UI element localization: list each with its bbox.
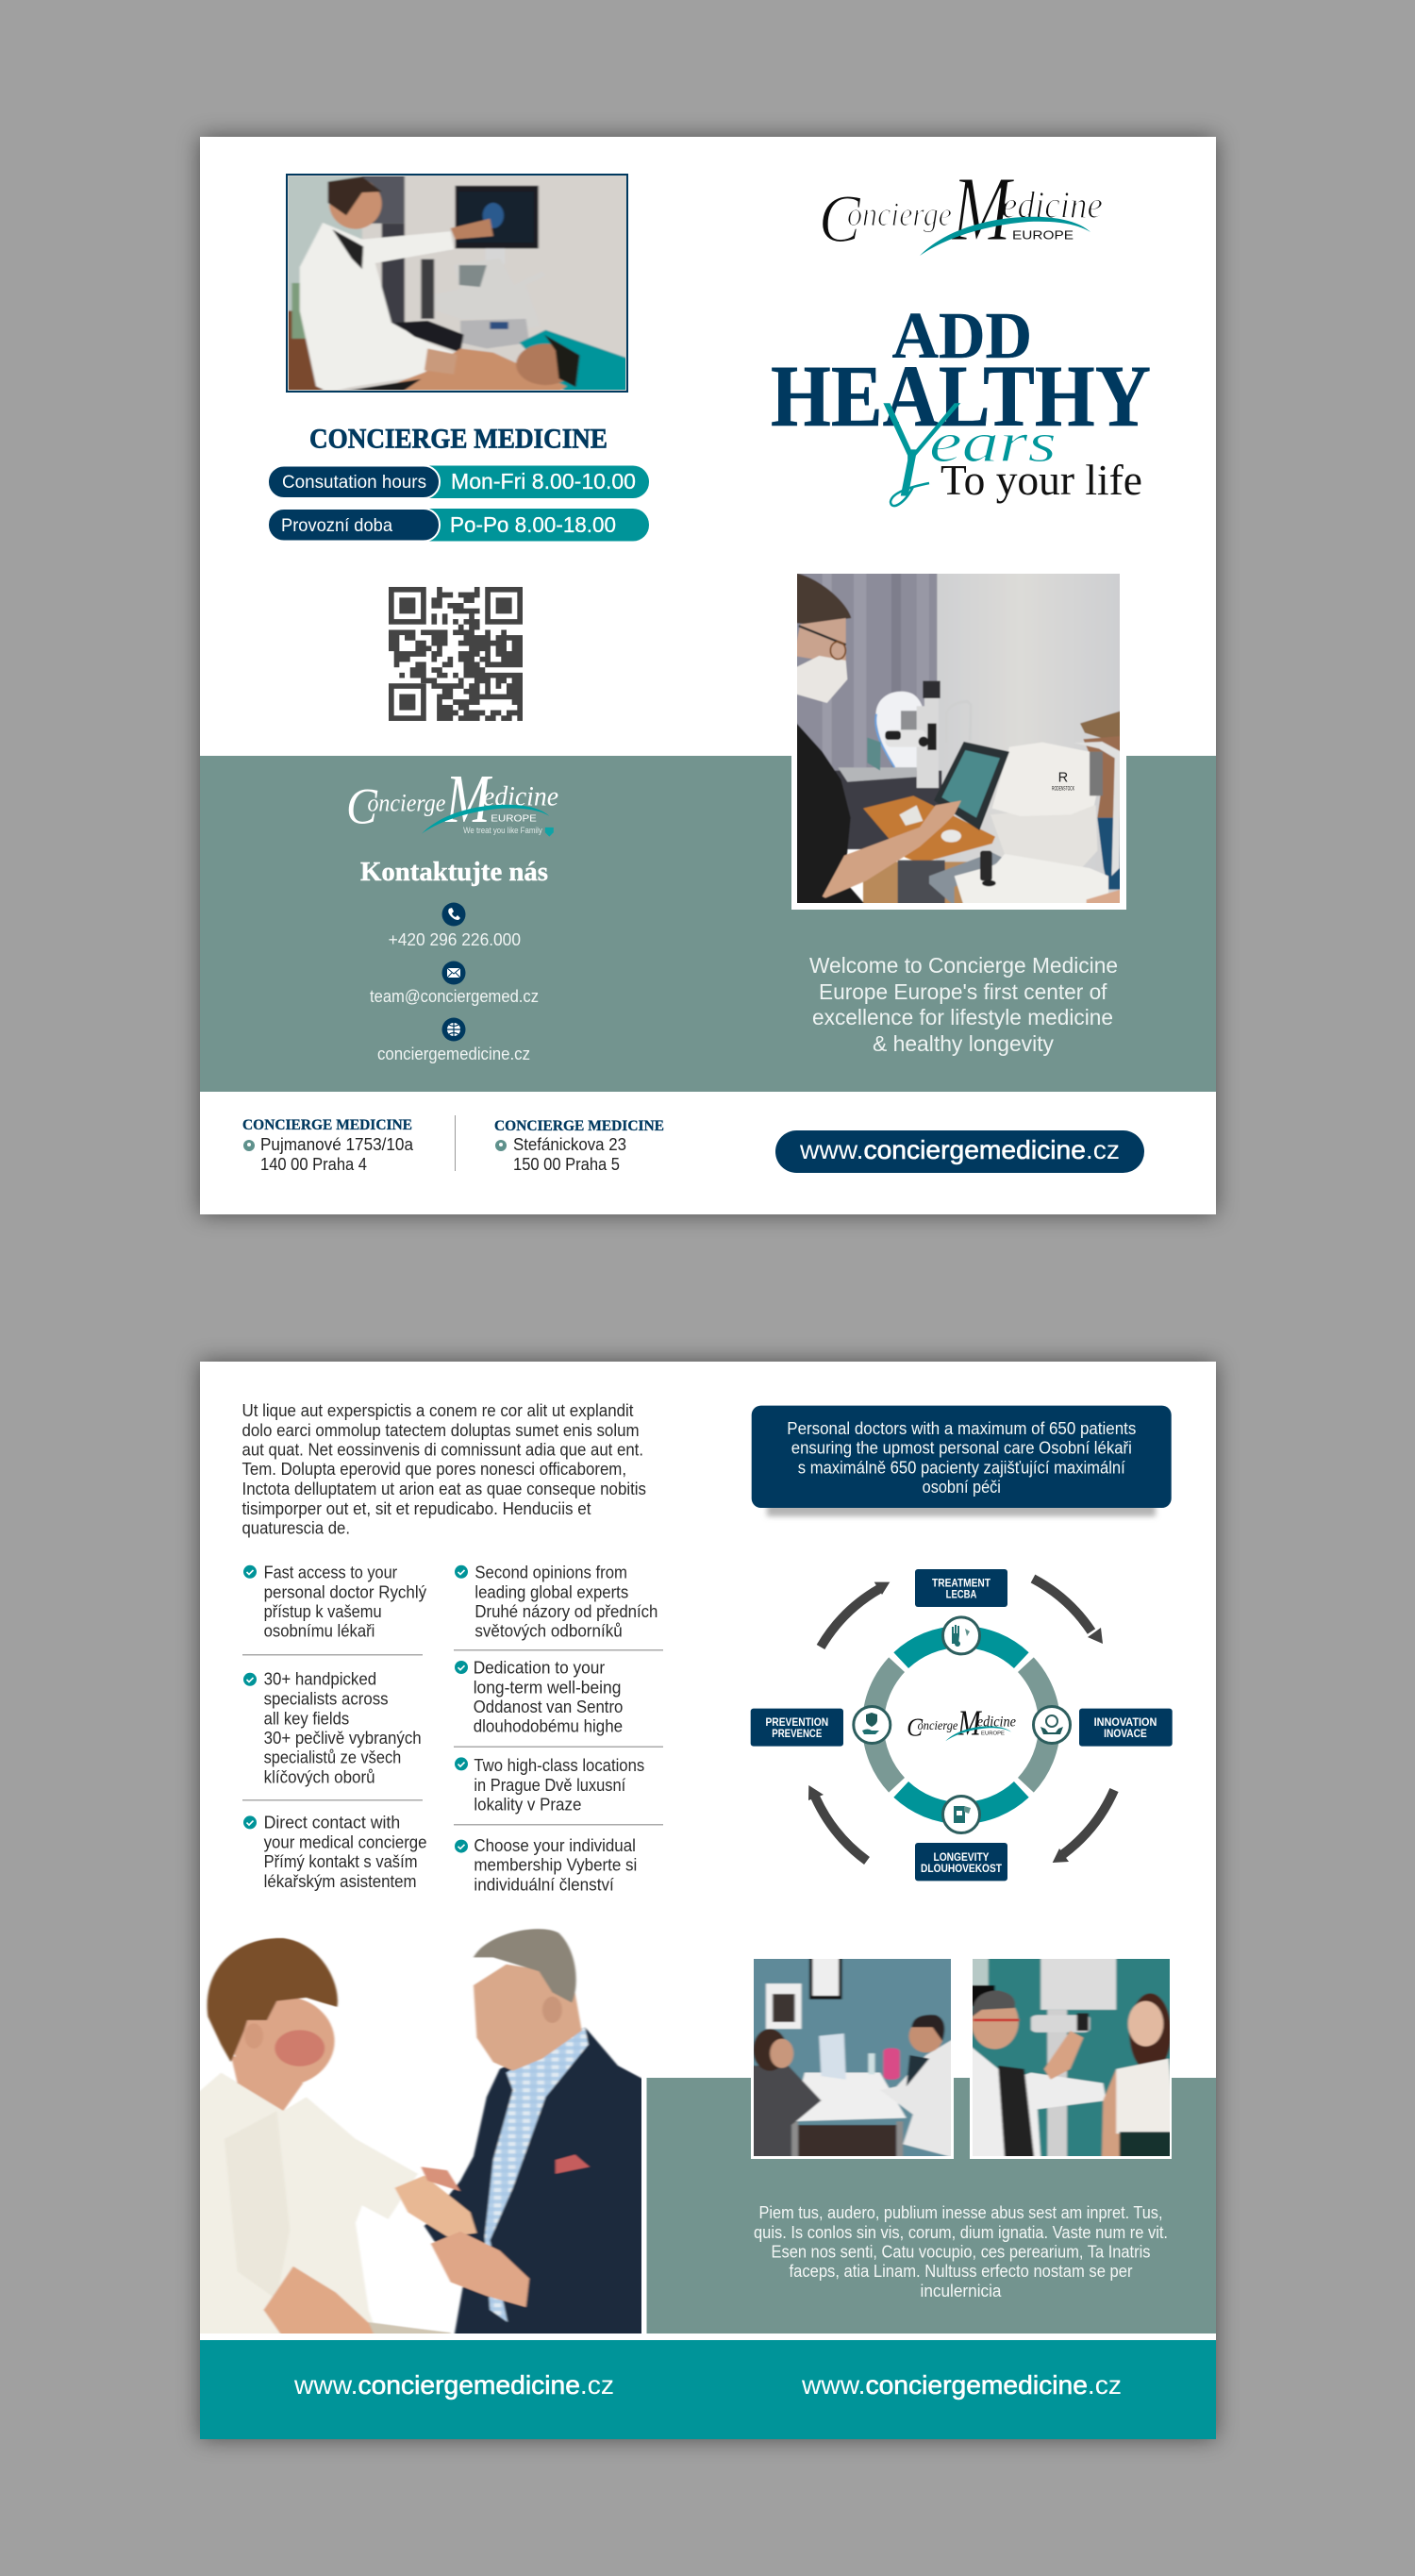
title: Add Healthy Years to your life: ADD (892, 300, 1032, 373)
icon: prevention (854, 1706, 891, 1744)
logo: white logo on contact band: We treat you like Family (463, 826, 542, 835)
address: Pujmanové: Pujmanové 1753/10a (260, 1135, 414, 1154)
list item: fast access (243, 1564, 426, 1641)
heading: Concierge Medicine: CONCIERGE MEDICINE (309, 423, 608, 455)
hours row: consultation hours: Mon-Fri 8.00-10.00 (451, 469, 636, 493)
callout: personal doctors: s maximálně 650 pacienty zajišťující maximální (798, 1459, 1125, 1478)
logo: Concierge Medicine Europe: oncierge (847, 195, 952, 233)
text: welcome message: Welcome to Concierge Medicine (809, 953, 1118, 978)
list item: second opinions (455, 1564, 658, 1641)
list item: membership: Choose your individual (474, 1836, 636, 1855)
list item: handpicked specialists (243, 1670, 422, 1786)
hours row: consultation hours (268, 466, 649, 498)
title: Add Healthy Years to your life: To your life (941, 456, 1142, 504)
title: Add Healthy Years to your life: HEALTHY (771, 348, 1151, 445)
text: welcome message (809, 953, 1118, 1056)
list item: fast access: osobnímu lékaři (264, 1622, 375, 1641)
icon: innovation (1034, 1706, 1070, 1744)
logo: Concierge Medicine Europe: M (950, 159, 1015, 260)
text: intro paragraph: Inctota delluptatem ut arion eat as quae conseque nobitis (241, 1480, 646, 1498)
list item: direct contact: Přímý kontakt s vaším (264, 1852, 417, 1871)
text: intro paragraph (241, 1401, 646, 1538)
text: teal band paragraph (754, 2203, 1168, 2300)
text: intro paragraph: aut quat. Net eossinvenis di comnissunt adia que aut ent. (241, 1440, 643, 1459)
text: teal band paragraph: Esen nos senti, Catu vocupio, ces perearium, Ta Inatris (772, 2243, 1151, 2262)
list item: fast access: personal doctor Rychlý (264, 1582, 426, 1601)
text: welcome message: excellence for lifestyle medicine (812, 1005, 1113, 1029)
list item: dedication: Oddanost van Sentro (474, 1698, 623, 1716)
address: Stefánickova: CONCIERGE MEDICINE (494, 1118, 664, 1134)
list item: membership: membership Vyberte si (474, 1856, 637, 1875)
list item: dedication: Dedication to your (474, 1659, 605, 1678)
photo: eye examination device (791, 573, 1126, 910)
logo: Concierge Medicine Europe: C (819, 181, 861, 257)
label: innovation: INNOVATION (1094, 1715, 1157, 1729)
list item: two locations: lokality v Praze (474, 1796, 581, 1815)
photo: doctor consultation at desk (749, 1956, 956, 2160)
list item: second opinions: leading global experts (474, 1582, 628, 1601)
label: prevention (751, 1709, 843, 1747)
text: intro paragraph: Tem. Dolupta eperovid que pores nonesci officaborem, (241, 1460, 626, 1479)
photo: eye examination device: R (1058, 770, 1068, 785)
contact: website (377, 1017, 530, 1063)
list item: handpicked specialists: specialists across (264, 1690, 389, 1709)
text: teal band paragraph: Piem tus, audero, publium inesse abus sest am inpret. Tus, (758, 2203, 1162, 2222)
label: longevity (915, 1843, 1007, 1881)
arrow: prevention to treatment (821, 1582, 890, 1648)
logo: Concierge Medicine Europe: edicine (1002, 183, 1103, 226)
list item: two locations (455, 1756, 644, 1815)
text: intro paragraph: tisimporper out et, sit et repudicabo. Henduciis et (241, 1499, 591, 1518)
panel: teal text band (647, 2078, 1216, 2333)
contact: phone: +420 296 226.000 (389, 930, 521, 949)
label: treatment: LECBA (946, 1587, 977, 1600)
list item: handpicked specialists: all key fields (264, 1709, 349, 1728)
label: innovation: INOVACE (1104, 1727, 1147, 1740)
text: welcome message: Europe Europe's first center of (819, 979, 1107, 1004)
address: Stefánickova: Stefánickova 23 (513, 1135, 626, 1154)
list item: handpicked specialists: klíčových oborů (264, 1767, 375, 1786)
address: Pujmanové: 140 00 Praha 4 (260, 1155, 367, 1174)
list item: direct contact: Direct contact with (264, 1814, 400, 1832)
hours row: provozní doba: Po-Po 8.00-18.00 (450, 512, 616, 537)
QR code (389, 590, 523, 718)
logo: centre of ring: edicine (977, 1715, 1016, 1731)
logo: centre of ring: EUROPE (981, 1731, 1006, 1737)
list item: handpicked specialists: 30+ handpicked (264, 1670, 376, 1689)
list item: dedication (455, 1659, 623, 1736)
panel: inner page of brochure (195, 1362, 1216, 2439)
label: treatment (915, 1569, 1007, 1607)
panel: teal contact band (200, 756, 1216, 1092)
list item: second opinions: Druhé názory od předních (474, 1602, 658, 1621)
logo: centre of ring: C (907, 1712, 923, 1741)
list item: direct contact: lékařským asistentem (264, 1872, 417, 1891)
arrow: longevity to prevention (808, 1785, 867, 1861)
logo: white logo on contact band (346, 761, 558, 837)
logo: Concierge Medicine Europe (819, 159, 1103, 260)
list item: handpicked specialists: specialistů ze všech (264, 1748, 401, 1767)
list item: two locations: Two high-class locations (474, 1756, 644, 1775)
logo: white logo on contact band: edicine (483, 780, 558, 811)
ring: four segments (873, 1636, 1050, 1814)
list item: second opinions: světových odborníků (474, 1622, 623, 1641)
footer band with websites (200, 2340, 1216, 2439)
callout: personal doctors: Personal doctors with a maximum of 650 patients (787, 1419, 1136, 1438)
list item: second opinions: Second opinions from (474, 1564, 627, 1582)
photo: eye examination with patient (969, 1957, 1175, 2160)
contact: email (370, 961, 539, 1006)
text: welcome message: & healthy longevity (873, 1031, 1054, 1056)
text: intro paragraph: quaturescia de. (241, 1519, 350, 1538)
list item: direct contact: your medical concierge (264, 1833, 426, 1852)
list item: direct contact (243, 1814, 426, 1891)
logo: Concierge Medicine Europe: EUROPE (1012, 228, 1074, 243)
title: Add Healthy Years to your life (771, 300, 1151, 528)
callout: personal doctors: osobní péči (923, 1478, 1001, 1497)
logo: white logo on contact band: M (445, 761, 493, 837)
photo: consultant with young patient (195, 1929, 644, 2338)
hours row: provozní doba: Provozní doba (281, 516, 392, 536)
label: longevity: LONGEVITY (934, 1850, 989, 1864)
address: Pujmanové: CONCIERGE MEDICINE (242, 1117, 412, 1133)
logo: centre of ring: oncierge (918, 1718, 957, 1732)
logo: centre of ring: M (957, 1704, 983, 1744)
list item: handpicked specialists: 30+ pečlivě vybraných (264, 1729, 422, 1748)
label: treatment: TREATMENT (932, 1576, 991, 1589)
list item: dedication: dlouhodobému highe (474, 1717, 623, 1736)
text: intro paragraph: dolo earci ommolup tatectem doluptas sumet enis solum (241, 1421, 640, 1440)
text: teal band paragraph: faceps, atia Linam. Nultuss erfecto nostam se per (789, 2262, 1132, 2281)
list item: membership: individuální členství (474, 1875, 614, 1894)
website button: www.conciergemedicine.cz (799, 1135, 1120, 1164)
logo: white logo on contact band: oncierge (367, 789, 445, 817)
heading: contact us: Kontaktujte nás (360, 857, 548, 887)
address: Stefánickova (494, 1118, 664, 1174)
label: prevention: PREVENTION (765, 1715, 828, 1729)
logo: white logo on contact band: EUROPE (491, 814, 537, 825)
title: Add Healthy Years to your life: ears (929, 411, 1057, 474)
icon: longevity (943, 1797, 979, 1832)
hours row: consultation hours: Consutation hours (282, 473, 426, 493)
text: teal band paragraph: inculernicia (921, 2282, 1002, 2300)
list item: fast access: přístup k vašemu (264, 1602, 382, 1621)
website button (775, 1130, 1144, 1173)
icon: treatment (943, 1617, 979, 1654)
logo: centre of ring (907, 1704, 1016, 1744)
diagram: care cycle (751, 1569, 1173, 1881)
callout: personal doctors: ensuring the upmost personal care Osobní lékaři (791, 1439, 1132, 1458)
list item: fast access: Fast access to your (264, 1564, 397, 1582)
panel: front page of brochure (200, 137, 1216, 1214)
label: longevity: DLOUHOVEKOST (921, 1862, 1003, 1875)
contact: website: conciergemedicine.cz (377, 1045, 530, 1063)
logo: white logo on contact band: C (346, 778, 378, 834)
callout: personal doctors (752, 1406, 1172, 1516)
title: Add Healthy Years to your life: Y (864, 370, 968, 528)
arrow: treatment to innovation (1033, 1579, 1103, 1644)
list item: dedication: long-term well-being (474, 1678, 621, 1697)
address: Stefánickova: 150 00 Praha 5 (513, 1155, 620, 1174)
footer band with websites: www.conciergemedicine.cz (293, 2370, 614, 2400)
hours row: provozní doba (268, 509, 649, 542)
contact: email: team@conciergemed.cz (370, 987, 539, 1006)
text: intro paragraph: Ut lique aut experspictis a conem re cor alit ut explandit (241, 1401, 634, 1420)
address: Pujmanové (242, 1117, 414, 1174)
list item: membership (455, 1836, 637, 1894)
arrow: innovation to longevity (1053, 1790, 1114, 1863)
text: teal band paragraph: quis. Is conlos sin vis, corum, dium ignatia. Vaste num re vit. (754, 2223, 1168, 2242)
list item: two locations: in Prague Dvě luxusní (474, 1776, 625, 1795)
photo: doctor performing ultrasound (283, 172, 634, 394)
label: prevention: PREVENCE (772, 1727, 822, 1740)
photo: eye examination device: RODENSTOCK (1052, 785, 1074, 792)
contact: phone (389, 902, 521, 949)
footer band with websites: www.conciergemedicine.cz (801, 2370, 1122, 2400)
label: innovation (1079, 1709, 1173, 1747)
